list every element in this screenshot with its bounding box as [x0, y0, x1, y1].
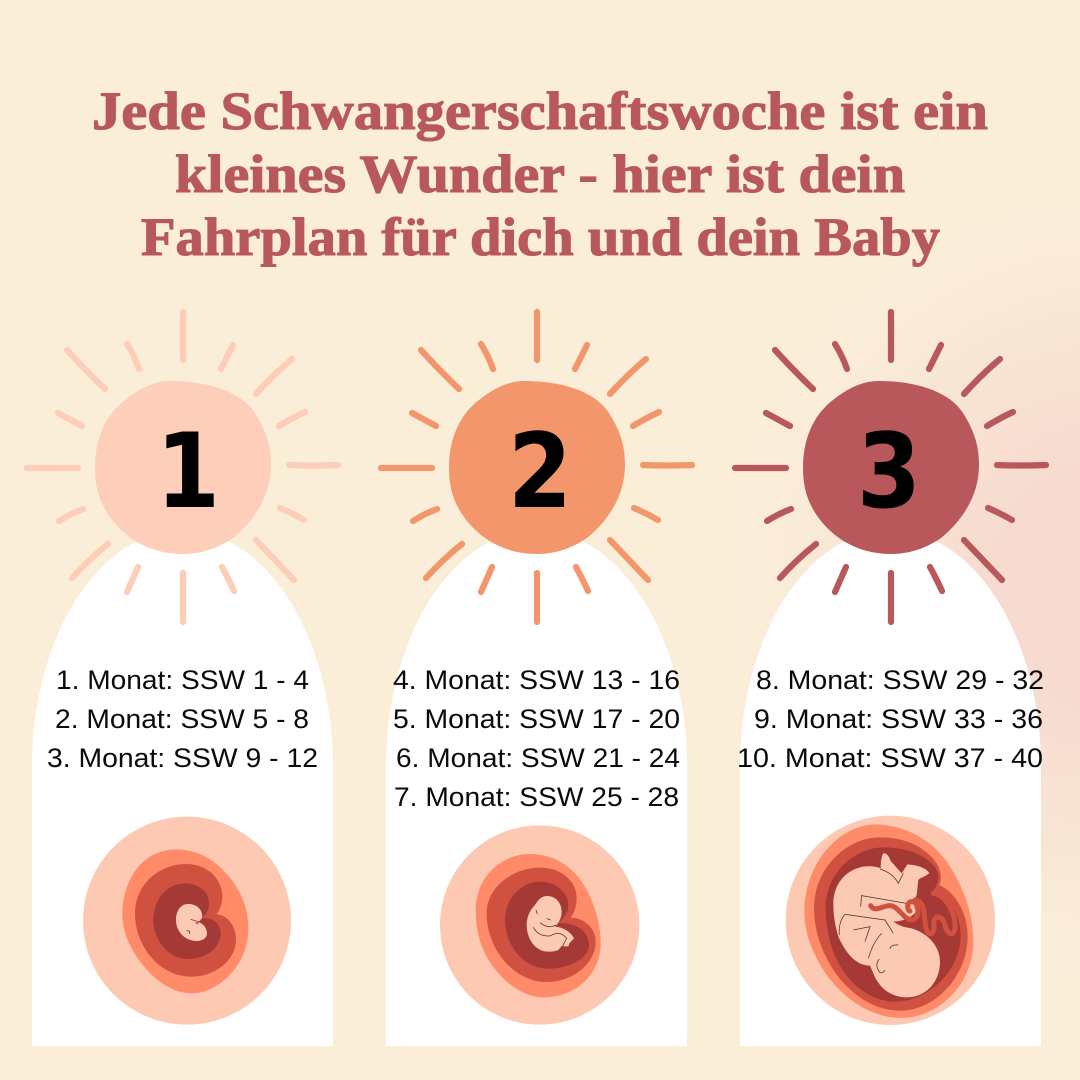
title — [92, 81, 988, 267]
text block: months 1-3: 3. Monat: SSW 9 - 12 — [47, 743, 318, 773]
text block: months 8-10: 10. Monat: SSW 37 - 40 — [737, 743, 1043, 773]
icon: sun 1: 1 — [156, 412, 220, 532]
text block: months 4-7: 5. Monat: SSW 17 - 20 — [393, 704, 680, 734]
text block: months 8-10: 8. Monat: SSW 29 - 32 — [756, 665, 1044, 695]
icon: sun 3 — [735, 312, 1046, 622]
text block: months 4-7: 6. Monat: SSW 21 - 24 — [396, 743, 680, 773]
illustration: fetus third trimester — [786, 816, 995, 1025]
text block: months 4-7 — [393, 665, 680, 812]
icon: sun 1 — [27, 312, 338, 622]
title: Fahrplan für dich und dein Baby — [141, 207, 940, 267]
text block: months 4-7: 4. Monat: SSW 13 - 16 — [393, 665, 680, 695]
icon: sun 3: 3 — [857, 412, 921, 532]
text block: months 1-3: 1. Monat: SSW 1 - 4 — [56, 665, 309, 695]
text block: months 8-10: 9. Monat: SSW 33 - 36 — [754, 704, 1043, 734]
illustration: fetus second trimester — [440, 825, 639, 1025]
title: kleines Wunder - hier ist dein — [175, 144, 905, 204]
icon: sun 2 — [381, 312, 692, 622]
illustration: embryo first trimester — [83, 817, 291, 1025]
text block: months 4-7: 7. Monat: SSW 25 - 28 — [394, 782, 679, 812]
icon: sun 2: 2 — [508, 412, 572, 532]
panel: arch 3 — [740, 530, 1041, 1046]
text block: months 1-3 — [47, 665, 318, 773]
text block: months 1-3: 2. Monat: SSW 5 - 8 — [55, 704, 309, 734]
panel: arch 2 — [386, 530, 687, 1046]
title: Jede Schwangerschaftswoche ist ein — [92, 81, 988, 141]
panel: arch 1 — [32, 530, 333, 1046]
text block: months 8-10 — [737, 665, 1044, 773]
